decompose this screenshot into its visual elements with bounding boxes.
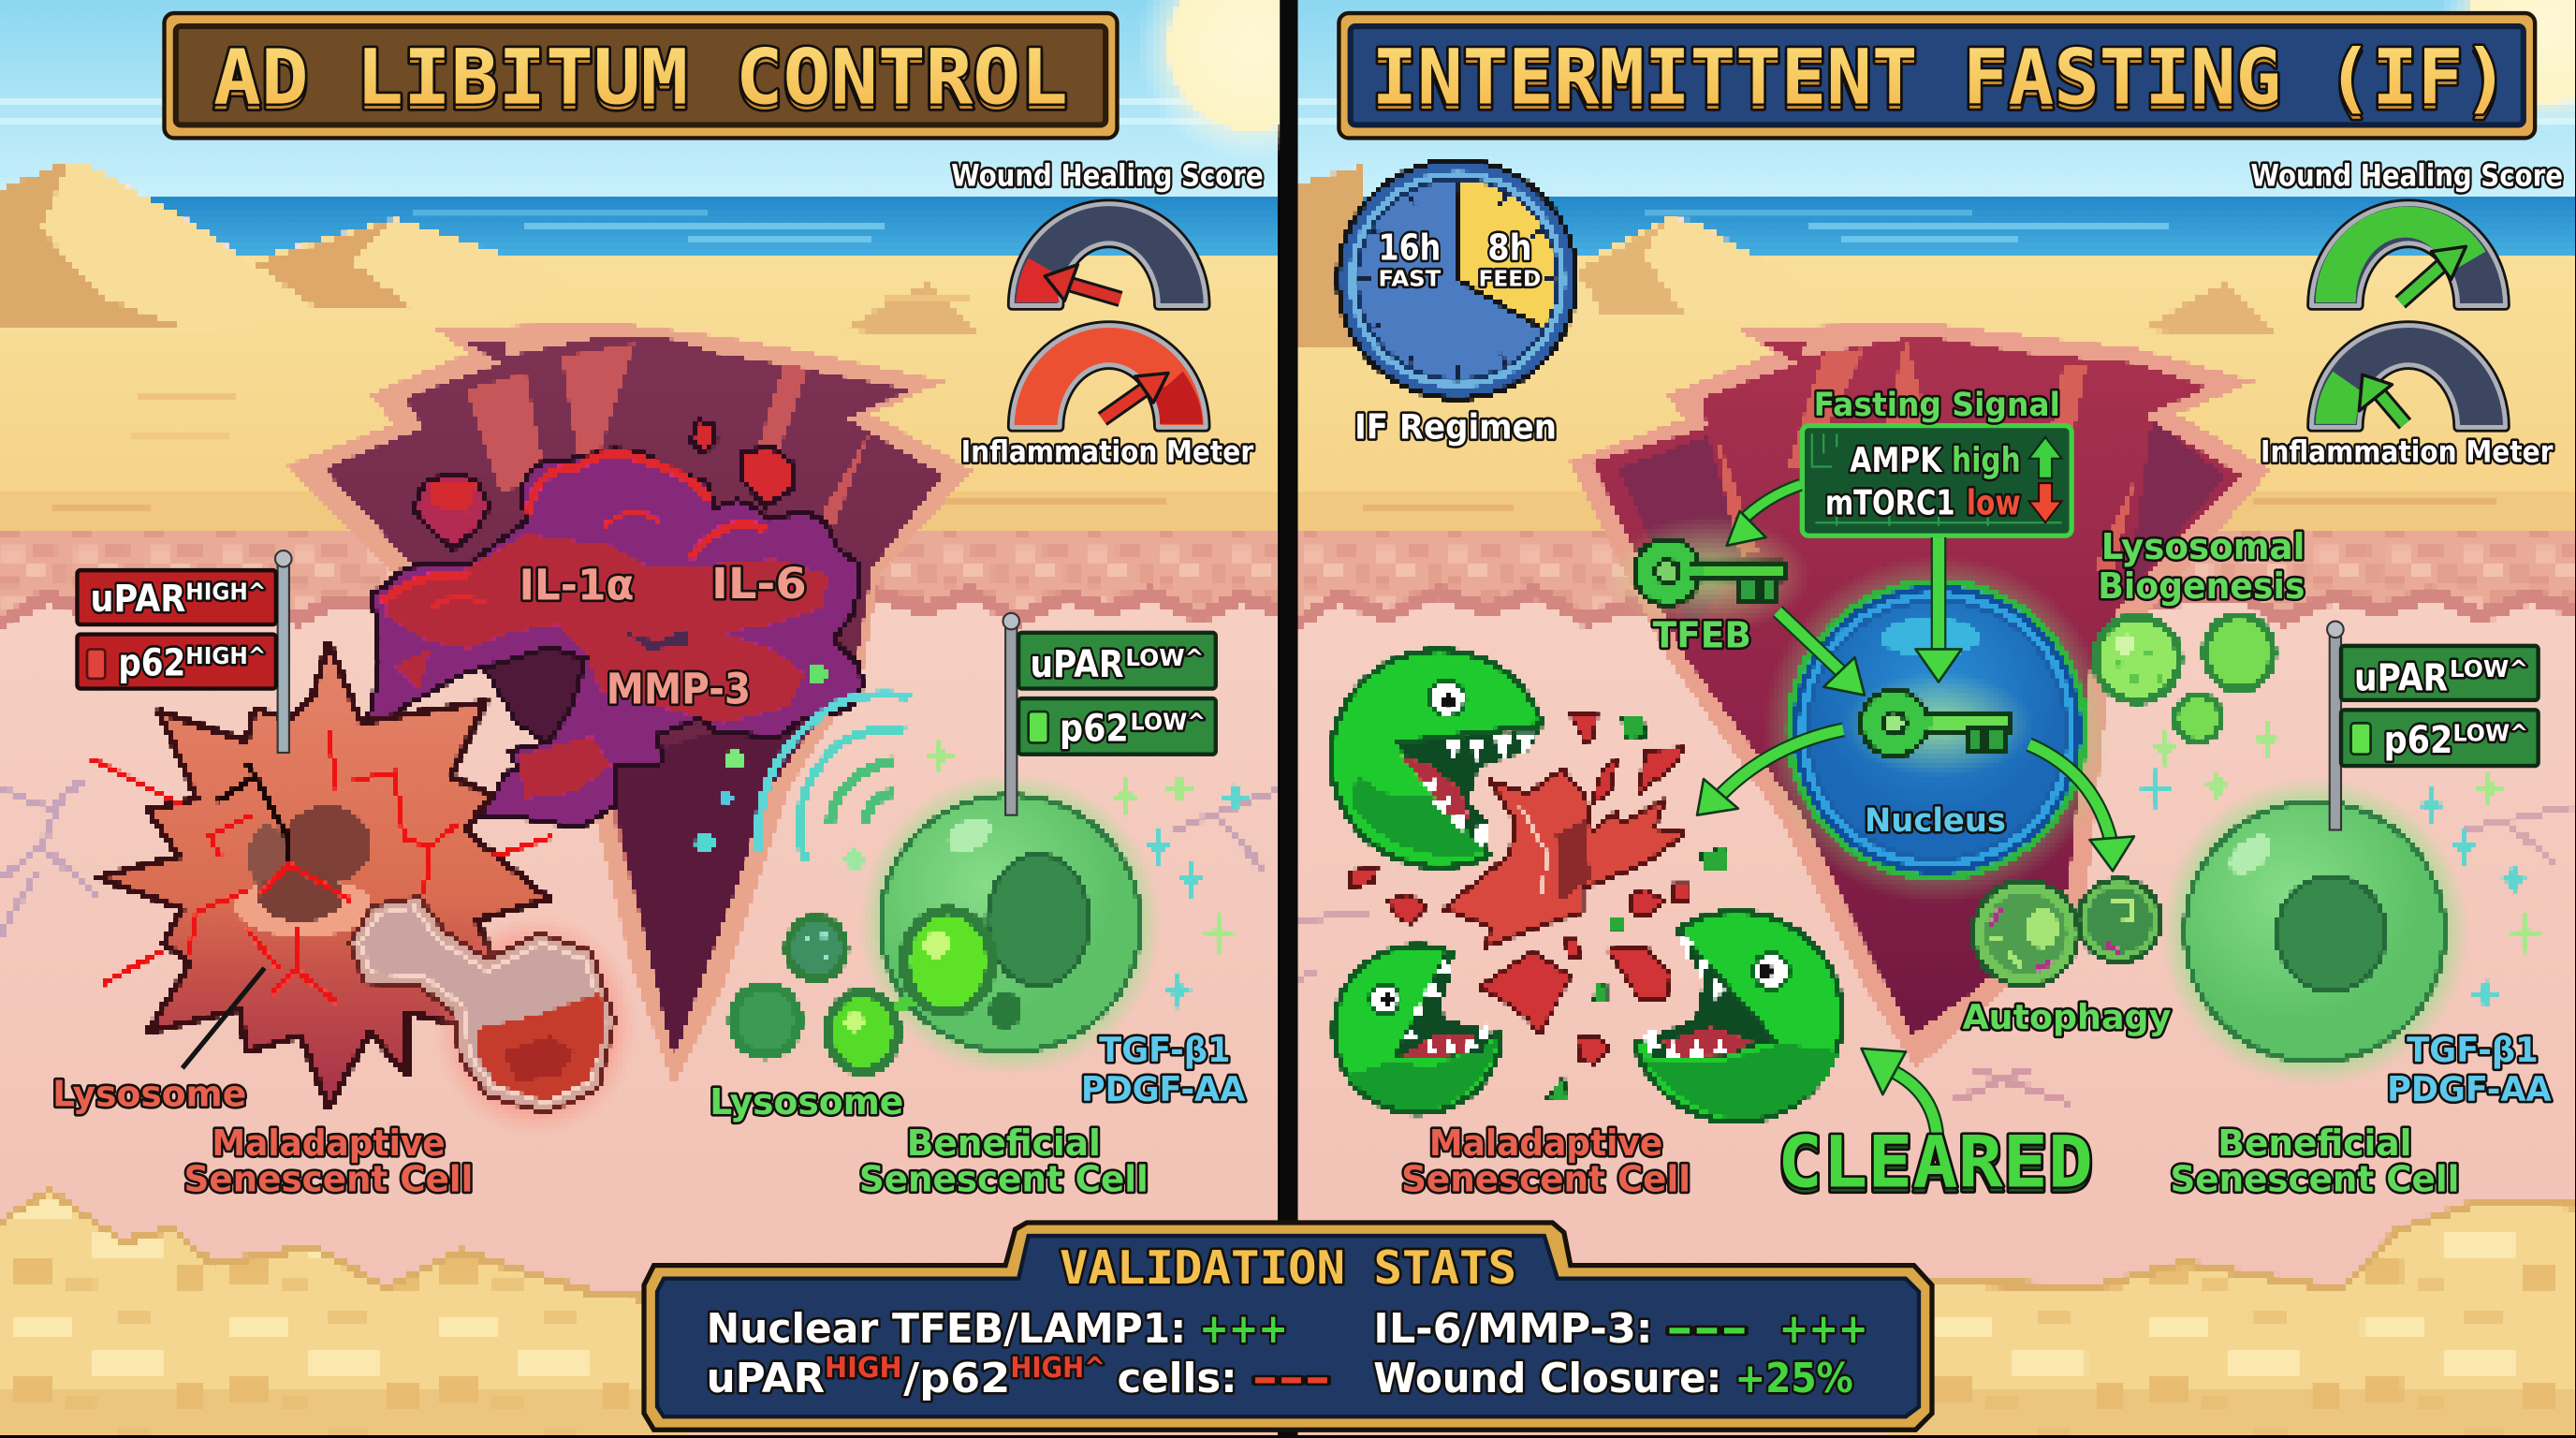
labels: fasting panel: 8h — [1487, 227, 1532, 269]
labels: control panel: Lysosome — [52, 1073, 246, 1115]
pacman phagocyte: bottom left — [1334, 946, 1501, 1113]
labels: control panel: PDGF-AA — [1081, 1069, 1246, 1109]
beneficial senescent cell: control — [859, 772, 1162, 1075]
labels: fasting panel: CLEARED — [1778, 1126, 2093, 1209]
background scene: right panel — [1298, 0, 2576, 1438]
labels: fasting panel: TGF-β1 — [2407, 1030, 2539, 1070]
stat: uPAR and p62 cells: /p62 — [903, 1355, 1010, 1402]
center divider — [1280, 0, 1298, 1438]
labels: control panel: Maladaptive — [212, 1123, 446, 1165]
labels: fasting panel: PDGF-AA — [2387, 1069, 2552, 1109]
flag: uPAR and p62 low control — [1003, 613, 1216, 815]
labels: control panel: Beneficial — [907, 1123, 1101, 1165]
key: nuclear TFEB — [1843, 672, 2034, 777]
gauge: wound healing score fasting — [2311, 204, 2506, 306]
labels: control panel: MMP-3 — [607, 664, 751, 713]
arrow: nucleus to autophagy — [2029, 744, 2134, 871]
stat: uPAR and p62 cells — [707, 1352, 1331, 1402]
flag: uPAR and p62 low control: LOW^ — [1131, 708, 1206, 735]
labels: fasting panel: FAST — [1379, 267, 1442, 291]
stat: IL-6 and MMP-3 — [1373, 1305, 1868, 1353]
panel: ad libitum control — [52, 13, 1264, 1201]
beneficial senescent cell: fasting — [2141, 720, 2539, 1086]
labels: control panel: Lysosome — [710, 1081, 903, 1123]
flag: uPAR and p62 low fasting: LOW^ — [2452, 720, 2528, 747]
arrow: signal box to TFEB — [1727, 485, 1801, 546]
labels: fasting panel: Biogenesis — [2098, 565, 2305, 608]
panel: validation stats — [644, 1223, 1932, 1430]
flag: uPAR and p62 low control: LOW^ — [1125, 644, 1204, 671]
stat: IL-6 and MMP-3: +++ — [1779, 1305, 1868, 1353]
labels: fasting panel: Senescent Cell — [2170, 1159, 2459, 1201]
labels: control panel: Senescent Cell — [184, 1159, 473, 1201]
cell debris: cleared senescent cell — [1351, 715, 1728, 1101]
stat: uPAR and p62 cells: HIGH^ — [1010, 1352, 1105, 1385]
cytokine cloud — [361, 420, 859, 825]
stat: IL-6 and MMP-3: IL-6/MMP-3: — [1373, 1305, 1653, 1353]
flag: uPAR and p62 low fasting: p62 — [2384, 718, 2452, 762]
stat: uPAR and p62 cells: HIGH — [825, 1352, 902, 1385]
labels: fasting panel: TFEB — [1653, 615, 1751, 657]
autophagy vesicles — [1973, 879, 2160, 986]
gauge: wound healing score control — [1012, 204, 1206, 306]
labels: fasting panel: Maladaptive — [1429, 1123, 1662, 1165]
key: TFEB — [1606, 516, 1810, 635]
labels: control panel: Senescent Cell — [859, 1159, 1149, 1201]
labels: fasting panel: 16h — [1379, 227, 1441, 269]
labels: control panel: TGF-β1 — [1099, 1030, 1231, 1070]
labels: control panel: IL-1α — [520, 561, 634, 610]
title banner: intermittent fasting: INTERMITTENT FASTING (IF) — [1372, 39, 2509, 127]
flag: uPAR and p62 low control: uPAR — [1030, 642, 1123, 686]
title banner: intermittent fasting — [1339, 13, 2535, 138]
title banner: intermittent fasting: INTERMITTENT FASTING (IF) — [1372, 35, 2509, 123]
gauge: inflammation meter fasting — [2311, 326, 2506, 427]
title banner: ad libitum control: AD LIBITUM CONTROL — [213, 39, 1068, 127]
background scene: left panel — [0, 0, 1367, 1438]
labels: fasting panel: CLEARED — [1778, 1121, 2093, 1203]
arrow: signal box to nucleus — [1915, 537, 1962, 682]
gauge: inflammation meter control — [1012, 326, 1206, 427]
wound chasm: control — [287, 322, 973, 1085]
nucleus — [1763, 555, 2111, 903]
clock: IF regimen — [1336, 158, 1579, 401]
flag: uPAR and p62 low fasting: LOW^ — [2450, 655, 2528, 682]
title banner: intermittent fasting: INTERMITTENT FASTING (IF) — [1372, 39, 2509, 127]
labels: control panel — [52, 159, 1264, 1201]
flag: uPAR and p62 low control: p62 — [1060, 707, 1129, 751]
flag: uPAR and p62 high: HIGH^ — [185, 579, 266, 606]
lysosome flask: damaged — [350, 897, 637, 1137]
stat: nuclear TFEB: +++ — [1199, 1305, 1288, 1353]
labels: fasting panel: Fasting Signal — [1814, 386, 2060, 424]
signal box: AMPK and mTORC1: AMPK — [1850, 440, 1943, 480]
stat: uPAR and p62 cells: cells: — [1117, 1355, 1237, 1402]
arrows: fasting pathway — [1697, 485, 2134, 1134]
flag: uPAR and p62 low fasting — [2327, 622, 2539, 829]
heading: validation stats: VALIDATION STATS — [1060, 1240, 1516, 1295]
pacman phagocyte: bottom right — [1634, 912, 1842, 1123]
signal box: AMPK and mTORC1: mTORC1 — [1825, 482, 1955, 522]
stat: wound closure: Wound Closure: — [1373, 1355, 1721, 1402]
lysosomal biogenesis spheres — [2091, 611, 2277, 744]
labels: fasting panel: Lysosomal — [2101, 526, 2305, 568]
flag: uPAR and p62 high: p62 — [118, 640, 185, 684]
stat: nuclear TFEB: Nuclear TFEB/LAMP1: — [707, 1305, 1186, 1353]
arrow: nucleus to phagocytes — [1697, 729, 1843, 815]
maladaptive senescent cell — [92, 642, 552, 1108]
labels: control panel: Wound Healing Score — [951, 159, 1264, 193]
signal box: AMPK and mTORC1: high — [1952, 440, 2021, 480]
title banner: ad libitum control: AD LIBITUM CONTROL — [213, 35, 1068, 123]
labels: control panel: Inflammation Meter — [961, 435, 1254, 469]
signal box: AMPK and mTORC1 — [1802, 426, 2071, 536]
stat: wound closure: +25% — [1734, 1355, 1853, 1402]
labels: fasting panel: Nucleus — [1865, 801, 2006, 840]
stat: uPAR and p62 cells: --- — [1251, 1355, 1331, 1402]
lysosomes: healthy — [728, 905, 1022, 1077]
stat: uPAR and p62 cells: uPAR — [707, 1355, 825, 1402]
signal box: AMPK and mTORC1: low — [1967, 482, 2021, 522]
stat: IL-6 and MMP-3: --- — [1666, 1305, 1748, 1353]
flag: uPAR and p62 high: HIGH^ — [185, 642, 266, 669]
title banner: ad libitum control — [165, 13, 1117, 138]
wound chasm: fasting — [1569, 322, 2271, 1068]
panel: intermittent fasting — [1331, 13, 2563, 1209]
labels: fasting panel — [1354, 159, 2563, 1209]
title banner: ad libitum control: AD LIBITUM CONTROL — [213, 39, 1068, 127]
leader line — [183, 968, 265, 1068]
labels: fasting panel: FEED — [1479, 267, 1541, 291]
signal waves and sparkles: control — [695, 664, 1251, 1011]
labels: control panel: IL-6 — [711, 559, 807, 609]
labels: fasting panel: IF Regimen — [1354, 407, 1557, 448]
pacman phagocyte: top — [1331, 650, 1543, 867]
flag: uPAR and p62 high — [77, 550, 292, 753]
arrow: cleared to phagocyte — [1862, 1049, 1937, 1134]
flag: uPAR and p62 low fasting: uPAR — [2354, 655, 2448, 699]
labels: fasting panel: Beneficial — [2217, 1123, 2411, 1165]
labels: fasting panel: Senescent Cell — [1401, 1159, 1690, 1201]
labels: fasting panel: Autophagy — [1962, 997, 2171, 1037]
flag: uPAR and p62 high: uPAR — [91, 577, 185, 621]
arrow: TFEB to nucleus — [1778, 611, 1865, 696]
